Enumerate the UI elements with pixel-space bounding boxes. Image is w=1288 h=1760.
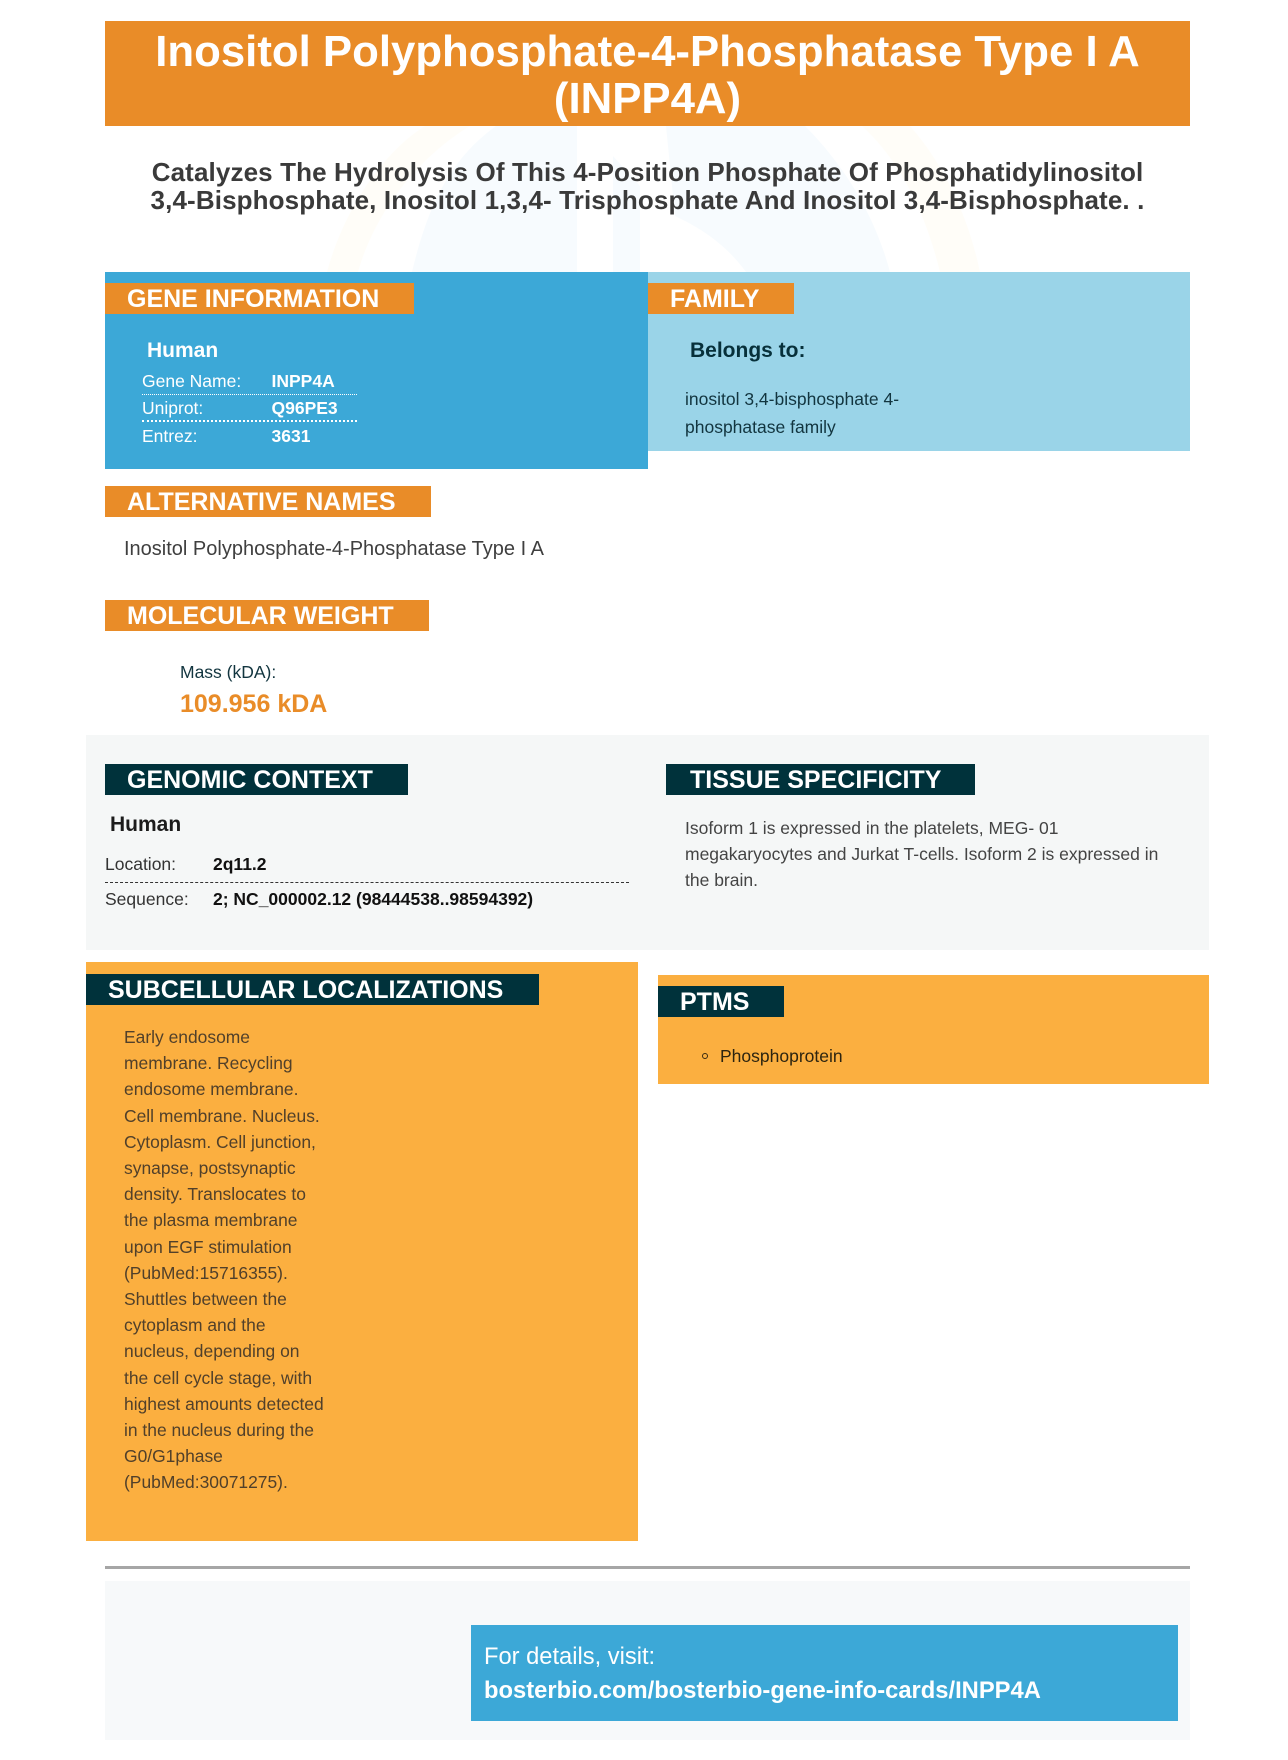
panel: subcellular localizations (86, 962, 638, 1541)
heading: subcellular localizations: SUBCELLULAR LOCALIZATIONS (108, 976, 503, 1004)
entrez row (142, 426, 310, 446)
panel: PTMs (658, 975, 1209, 1084)
family text: inositol 3,4-bisphosphate 4- (685, 389, 899, 409)
mass value: 109.956 kDA (180, 690, 327, 718)
heading: family (648, 283, 794, 314)
localization text: Early endosome (124, 1027, 250, 1047)
localization text: cytoplasm and the (124, 1315, 266, 1335)
belongs to label: Belongs to: (690, 339, 806, 362)
heading: family: FAMILY (670, 285, 759, 313)
PTM item: Phosphoprotein (720, 1046, 843, 1066)
entrez row: Entrez: (142, 426, 197, 446)
entrez row: 3631 (272, 426, 310, 446)
panel: gene information (105, 272, 648, 469)
uniprot row: Q96PE3 (272, 398, 338, 418)
localization text: density. Translocates to (124, 1184, 306, 1204)
sequence row: Sequence: (105, 889, 189, 909)
heading: molecular weight: MOLECULAR WEIGHT (127, 602, 394, 630)
subtitle: Catalyzes The Hydrolysis Of This 4-Position Phosphate Of Phosphatidylinositol (152, 157, 1143, 187)
mass label: Mass (kDA): (180, 662, 276, 682)
localization text: the cell cycle stage, with (124, 1368, 312, 1388)
background watermark logo (300, 126, 1000, 272)
localization text: nucleus, depending on (124, 1341, 300, 1361)
callout label: For details, visit: (484, 1644, 655, 1670)
localization text: (PubMed:30071275). (124, 1472, 288, 1492)
heading: PTMs (658, 986, 784, 1017)
localization text: endosome membrane. (124, 1079, 298, 1099)
gene name row (142, 369, 357, 395)
divider rule (105, 1566, 1190, 1569)
uniprot row: Uniprot: (142, 398, 203, 418)
location row: 2q11.2 (213, 854, 267, 874)
tissue specificity text: megakaryocytes and Jurkat T-cells. Isoform 2 is expressed in (685, 844, 1158, 864)
localization text: in the nucleus during the (124, 1420, 314, 1440)
tissue specificity text: the brain. (685, 870, 758, 890)
species label: Human (147, 339, 218, 362)
localization text: highest amounts detected (124, 1394, 324, 1414)
subtitle: 3,4-Bisphosphate, Inositol 1,3,4- Trisphosphate And Inositol 3,4-Bisphosphate. . (151, 185, 1144, 215)
heading: tissue specificity: TISSUE SPECIFICITY (690, 766, 941, 794)
heading: gene information: GENE INFORMATION (127, 285, 379, 313)
subtitle (151, 157, 1144, 215)
family text: phosphatase family (685, 417, 836, 437)
tissue specificity text: Isoform 1 is expressed in the platelets, MEG- 01 (685, 818, 1058, 838)
localization text: synapse, postsynaptic (124, 1158, 296, 1178)
localization text: Cell membrane. Nucleus. (124, 1106, 320, 1126)
panel: family (648, 272, 1190, 451)
gene name row: Gene Name: (142, 371, 241, 391)
bullet (702, 1053, 708, 1059)
location row: Location: (105, 854, 176, 874)
localization text: the plasma membrane (124, 1210, 298, 1230)
title: (INPP4A) (554, 74, 741, 123)
localization text (124, 1027, 324, 1492)
gene name row: INPP4A (272, 371, 335, 391)
heading: genomic context: GENOMIC CONTEXT (127, 766, 373, 794)
localization text: Shuttles between the (124, 1289, 287, 1309)
heading: alternative names: ALTERNATIVE NAMES (127, 488, 396, 516)
panel: genomic context and tissue specificity (86, 735, 1209, 950)
tissue specificity text (685, 818, 1158, 890)
alternative names text: Inositol Polyphosphate-4-Phosphatase Type I A (124, 538, 544, 560)
title (105, 21, 1190, 126)
sequence row: 2; NC_000002.12 (98444538..98594392) (213, 889, 533, 909)
callout url: bosterbio.com/bosterbio-gene-info-cards/INPP4A (484, 1677, 1041, 1704)
uniprot row (142, 395, 357, 422)
panel: footer (105, 1581, 1190, 1740)
localization text: Cytoplasm. Cell junction, (124, 1132, 316, 1152)
species label: Human (110, 813, 181, 836)
localization text: (PubMed:15716355). (124, 1263, 288, 1283)
heading: PTMs: PTMS (680, 988, 749, 1016)
location row (105, 851, 629, 883)
callout: details link (471, 1625, 1178, 1721)
localization text: upon EGF stimulation (124, 1237, 292, 1257)
localization text: G0/G1phase (124, 1446, 223, 1466)
localization text: membrane. Recycling (124, 1053, 293, 1073)
title: Inositol Polyphosphate-4-Phosphatase Type I A (155, 27, 1140, 76)
family text (685, 389, 899, 437)
